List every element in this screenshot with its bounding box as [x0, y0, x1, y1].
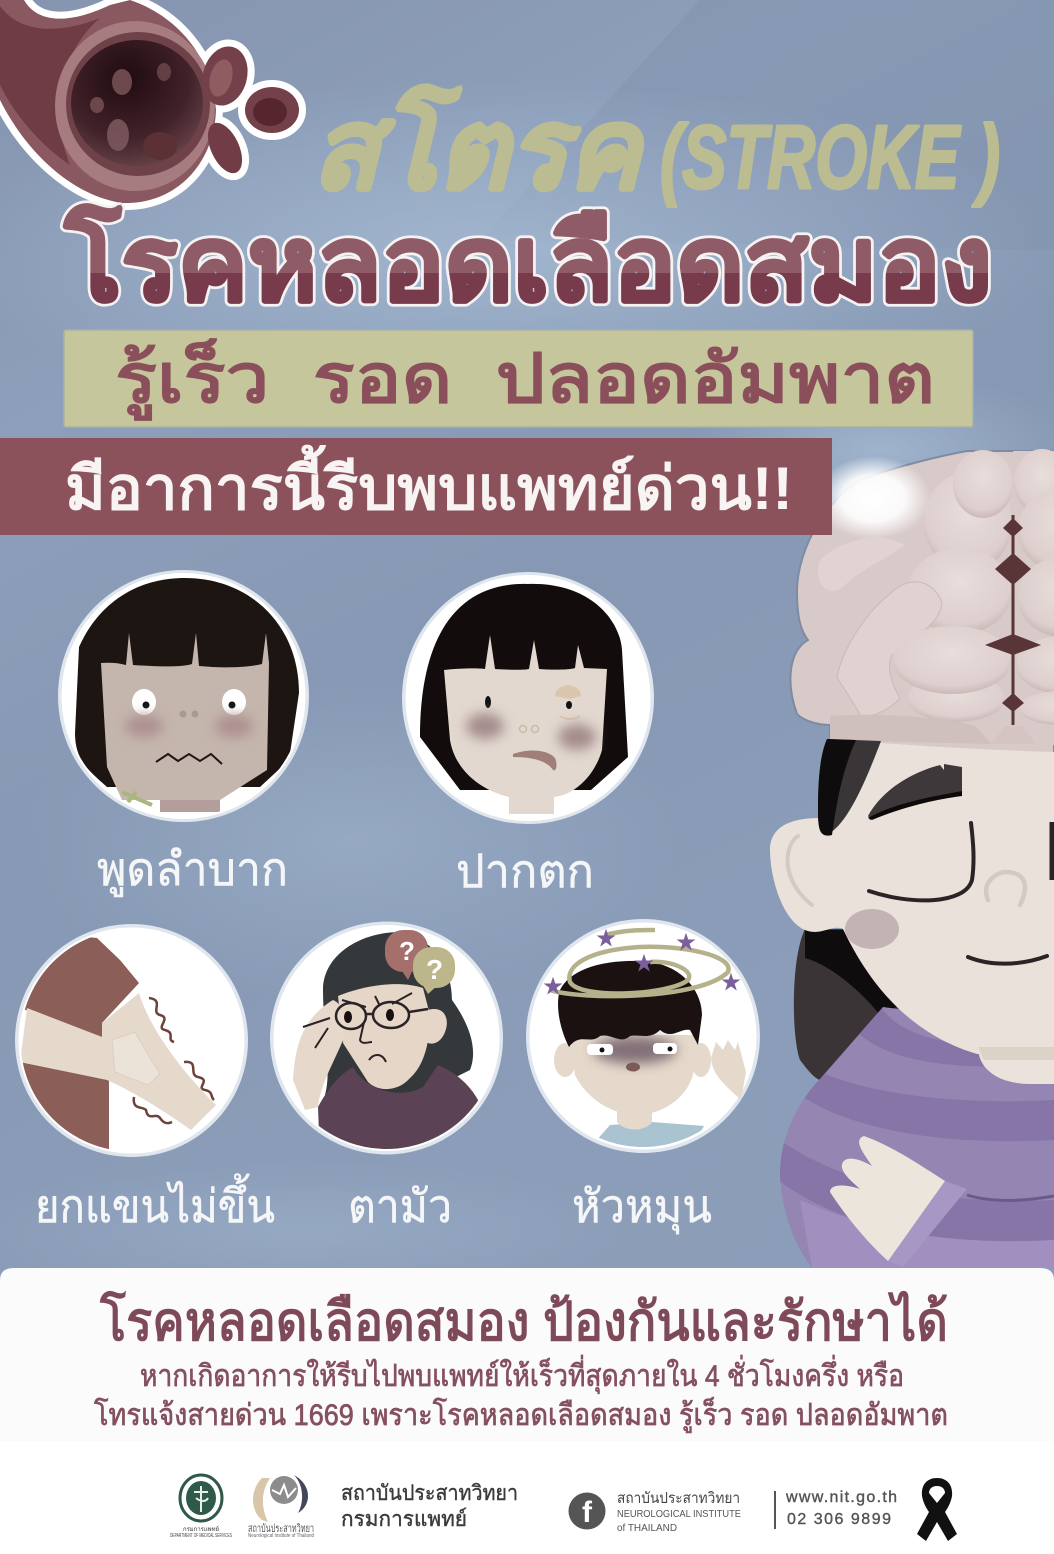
footer white band: [0, 1441, 1054, 1554]
institute name: [341, 1482, 518, 1531]
symptom: dizziness: ★: [676, 932, 696, 954]
logo: department of medical services: DEPARTMENT OF MEDICAL SERVICES: [170, 1533, 232, 1539]
panel body text: หากเกิดอาการให้รีบไปพบแพทย์ให้เร็วที่สุดภายใน 4 ชั่วโมงครึ่ง หรือ: [140, 1355, 904, 1395]
website and phone: [774, 1489, 897, 1529]
symptom: dizziness: ★: [596, 928, 616, 950]
symptom labels: พูดลำบาก: [97, 843, 288, 897]
symptom labels: ยกแขนไม่ขึ้น: [35, 1173, 275, 1232]
facebook contact: NEUROLOGICAL INSTITUTE: [617, 1508, 741, 1520]
symptom: blurred vision: ?: [426, 954, 443, 985]
logo: neurological institute: [248, 1475, 314, 1539]
symptom labels: ปากตก: [456, 845, 594, 897]
facebook contact: [568, 1490, 741, 1534]
symptom: dizziness: ★: [721, 972, 741, 994]
brain: [790, 449, 1054, 760]
symptom labels: ตามัว: [348, 1180, 452, 1232]
symptom: blurred vision: [270, 922, 503, 1160]
heading: โรคหลอดเลือดสมอง: โรคหลอดเลือดสมอง: [64, 204, 992, 323]
symptom: arm weakness: [15, 924, 248, 1160]
facebook contact: of THAILAND: [617, 1522, 677, 1534]
banner: รู้เร็ว รอด ปลอดอัมพาต: [64, 330, 973, 427]
heading: โรคหลอดเลือดสมอง: โรคหลอดเลือดสมอง: [64, 204, 992, 323]
title: stroke: สโตรค: [312, 84, 645, 212]
website and phone: 02 306 9899: [787, 1511, 891, 1528]
logo: neurological institute: Neurological Institute of Thailand: [248, 1533, 314, 1539]
symptom: blurred vision: ?: [399, 936, 415, 966]
symptom: dizziness: [526, 919, 760, 1153]
facebook contact: f: [582, 1496, 593, 1529]
website and phone: www.nit.go.th: [785, 1489, 897, 1506]
institute name: กรมการแพทย์: [341, 1507, 467, 1531]
character with brain exposed: [760, 739, 1054, 1270]
symptom labels: หัวหมุน: [572, 1180, 712, 1235]
logo: department of medical services: [170, 1475, 232, 1539]
panel body text: โทรแจ้งสายด่วน 1669 เพราะโรคหลอดเลือดสมอง รู้เร็ว รอด ปลอดอัมพาต: [94, 1396, 948, 1433]
panel body text: [94, 1355, 948, 1433]
logo: neurological institute: สถาบันประสาทวิทยา: [248, 1523, 314, 1535]
bottom info panel: [0, 1268, 1054, 1554]
banner: รู้เร็ว รอด ปลอดอัมพาต: รู้เร็ว รอด ปลอดอัมพาต: [115, 338, 935, 422]
symptom: mouth droop: [402, 572, 654, 824]
title: stroke: [312, 84, 1000, 212]
symptom labels: [35, 843, 712, 1235]
icon: black ribbon: [917, 1478, 957, 1541]
icon: blood vessel with red cells: [0, 0, 299, 203]
symptom: dizziness: ★: [634, 953, 654, 975]
panel heading: โรคหลอดเลือดสมอง ป้องกันและรักษาได้: [100, 1291, 948, 1352]
symptom: slurred speech: [58, 570, 309, 822]
facebook contact: สถาบันประสาทวิทยา: [617, 1490, 740, 1507]
banner: urgent: มีอาการนี้รีบพบแพทย์ด่วน!!: [65, 444, 793, 522]
institute name: สถาบันประสาทวิทยา: [341, 1482, 518, 1505]
banner: urgent: [0, 438, 832, 535]
symptom: dizziness: ★: [543, 976, 563, 998]
logo: department of medical services: กรมการแพทย์: [183, 1525, 219, 1533]
